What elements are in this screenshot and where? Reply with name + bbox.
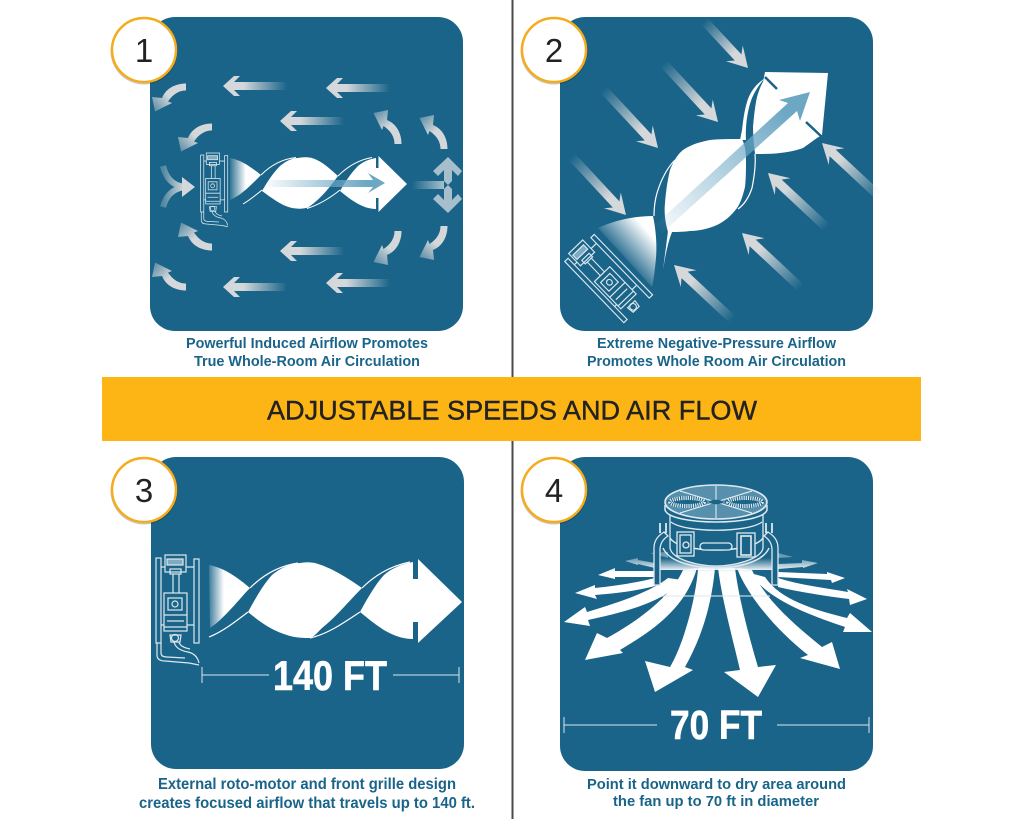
straight return arrows (223, 76, 390, 297)
caption 2: Promotes Whole Room Air Circulation (587, 354, 846, 370)
icon: fan unit tilted (563, 232, 653, 323)
badge 3: 3 (135, 472, 153, 509)
caption 3: External roto-motor and front grille design (158, 776, 456, 793)
caption 1 (186, 336, 428, 370)
badge 1: 1 (135, 32, 153, 69)
caption 3: creates focused airflow that travels up to 140 ft. (139, 795, 475, 812)
caption 1: Powerful Induced Airflow Promotes (186, 336, 428, 352)
airflow twist (209, 559, 462, 643)
panel 1: induced airflow (150, 17, 463, 331)
badge 2: 2 (545, 32, 563, 69)
icon: fan unit (156, 555, 199, 665)
base glow (655, 558, 778, 570)
dimension line (202, 667, 459, 683)
caption 2 (587, 336, 846, 370)
dimension line (564, 717, 869, 733)
curved return arrows (152, 84, 448, 290)
airflow twist (230, 156, 407, 212)
icon: fan unit facing up (654, 485, 778, 596)
merging intake arrow (163, 166, 195, 207)
panel 4: 70 ft downward (560, 457, 873, 771)
airflow twist (598, 72, 828, 287)
caption 4: Point it downward to dry area around (587, 777, 846, 793)
distance label: 70 FT (670, 702, 762, 748)
caption 4: the fan up to 70 ft in diameter (613, 794, 819, 810)
caption 1: True Whole-Room Air Circulation (194, 354, 420, 370)
icon: fan unit (201, 153, 228, 227)
faint side glow (650, 552, 793, 558)
banner (102, 377, 921, 441)
translucent direction arrow (267, 173, 385, 193)
badge 4 (520, 458, 588, 524)
badge 3 (110, 458, 178, 524)
banner heading: ADJUSTABLE SPEEDS AND AIR FLOW (267, 396, 758, 426)
vertical divider (512, 0, 514, 819)
panel 2: negative pressure (560, 13, 888, 331)
panel 3: 140 ft throw (151, 457, 464, 769)
arrows from upper left (563, 13, 756, 223)
radial airflow arrows (564, 558, 872, 697)
translucent direction arrow (655, 92, 810, 233)
badge 2 (520, 18, 588, 84)
caption 2: Extreme Negative-Pressure Airflow (597, 336, 837, 352)
badge 4: 4 (545, 472, 563, 509)
splitting outflow arrow (412, 157, 462, 213)
badge 1 (110, 18, 178, 84)
caption 4 (587, 777, 846, 810)
caption 3 (139, 776, 475, 812)
arrows from lower right (666, 135, 888, 328)
distance label: 140 FT (273, 652, 387, 699)
